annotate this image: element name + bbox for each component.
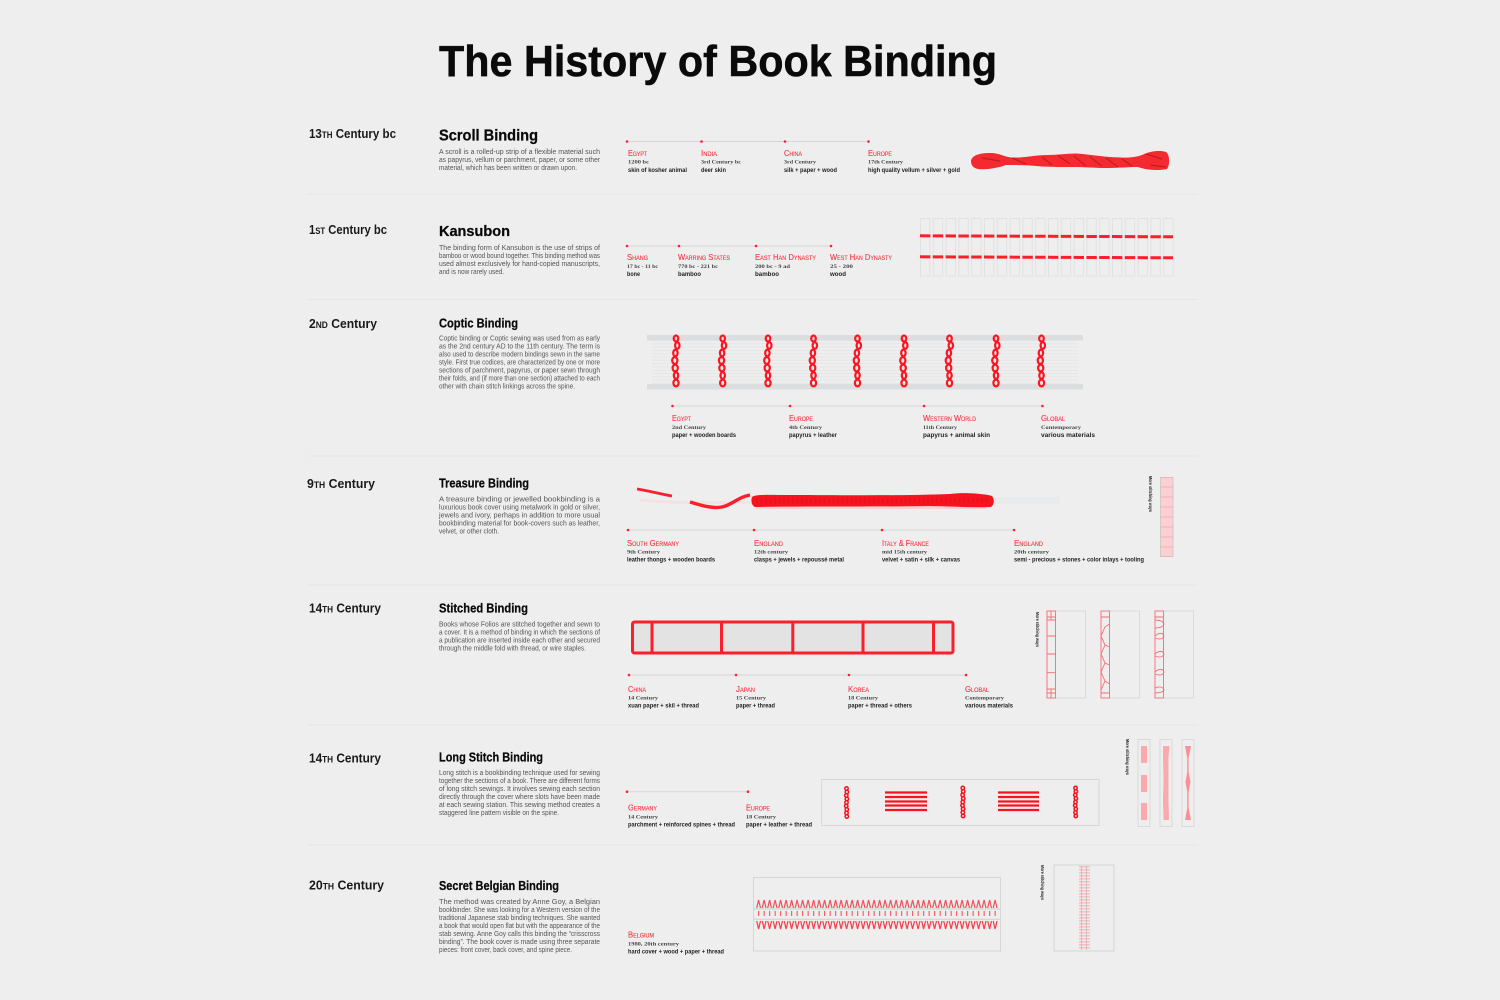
timeline xyxy=(626,140,960,174)
description: bookbinding material for book-covers such as leather, xyxy=(439,520,600,528)
description: A treasure binding or jewelled bookbinding is a xyxy=(439,496,600,504)
timeline entry: Belgium xyxy=(628,930,724,956)
description: a book that would open flat but with the appearance of the xyxy=(439,923,600,930)
heading: Treasure Binding xyxy=(439,476,529,490)
description: together the sections of a book. There are different forms xyxy=(439,778,600,785)
description: used almost exclusively for hand-copied manuscripts, xyxy=(439,261,600,268)
diagram: pink spine strip xyxy=(1160,477,1173,557)
rotated caption: More stitching ways xyxy=(1125,739,1130,776)
timeline: South Germany xyxy=(627,538,679,548)
timeline: silk + paper + wood xyxy=(784,168,837,174)
timeline: East Han Dynasty xyxy=(755,252,816,262)
description: luxurious book cover using metalwork in gold or silver, xyxy=(439,504,600,512)
description: also used to describe modern bindings sewn in the same xyxy=(439,352,600,358)
timeline xyxy=(671,405,1096,439)
timeline: parchment + reinforced spines + thread xyxy=(628,822,735,828)
timeline: 25 - 200 xyxy=(830,264,853,270)
description xyxy=(439,770,600,817)
timeline: West Han Dynasty xyxy=(830,252,892,262)
timeline: Europe xyxy=(789,413,813,423)
diagram: stitch pattern one xyxy=(1047,611,1086,698)
description: binding”. The book cover is made using three separate xyxy=(439,939,600,946)
diagram: long stitch variant three xyxy=(1182,740,1194,826)
timeline: paper + thread + others xyxy=(848,704,913,710)
diagram: stitch pattern three xyxy=(1155,611,1194,698)
timeline: 2nd Century xyxy=(672,425,706,431)
timeline: 1200 bc xyxy=(628,160,650,166)
timeline: deer skin xyxy=(701,168,726,174)
timeline: 20th century xyxy=(1014,550,1049,556)
heading: Stitched Binding xyxy=(439,600,528,616)
heading: Long Stitch Binding xyxy=(439,750,543,764)
description: stab sewing. Anne Goy calls this binding the “crisscross xyxy=(439,931,600,938)
description: through the middle fold with thread, or wire staples. xyxy=(439,646,586,652)
row: coptic binding xyxy=(309,316,1096,439)
row: scroll binding xyxy=(309,126,1169,174)
century label: 2ND Century xyxy=(309,316,378,331)
timeline: bone xyxy=(627,272,641,278)
description: pieces: front cover, back cover, and spine piece. xyxy=(439,947,572,954)
timeline: Contemporary xyxy=(965,696,1004,702)
description: The method was created by Anne Goy, a Belgian xyxy=(439,899,600,906)
timeline: 9th Century xyxy=(627,550,660,556)
illustration: coptic chain stitches xyxy=(647,335,1083,390)
description: staggered line pattern visible on the spine. xyxy=(439,810,559,817)
timeline: 17th Century xyxy=(868,160,903,166)
timeline: papyrus + animal skin xyxy=(923,433,990,439)
century label: 14TH Century xyxy=(309,750,382,766)
title: The History of Book Binding xyxy=(439,37,997,86)
timeline: England xyxy=(754,538,784,548)
timeline: Japan xyxy=(736,684,755,694)
century label: 13TH Century bc xyxy=(309,126,396,141)
rotated caption: More stitching ways xyxy=(1040,865,1045,901)
description: other with chain stitch linkings across the spine. xyxy=(439,384,575,390)
description: as papyrus, vellum or parchment, paper, or some other xyxy=(439,157,601,164)
heading: Kansubon xyxy=(439,223,510,240)
timeline: 17 bc - 11 bc xyxy=(627,264,659,270)
description xyxy=(439,899,600,954)
century label: 1ST Century bc xyxy=(309,222,387,237)
timeline: Western World xyxy=(923,413,977,423)
timeline: England xyxy=(1014,538,1044,548)
timeline: Shang xyxy=(627,252,648,262)
timeline: 18 Century xyxy=(746,814,776,820)
timeline: papyrus + leather xyxy=(789,433,838,439)
timeline: Europe xyxy=(868,148,892,158)
timeline: India xyxy=(701,148,717,158)
description: jewels and ivory, perhaps in addition to more usual xyxy=(438,512,600,520)
description: material, which has been written or drawn upon. xyxy=(439,165,577,172)
illustration: bamboo strips with red stitching xyxy=(920,218,1176,277)
description: their folds, and (if more than one section) attached to each xyxy=(439,376,600,382)
timeline: mid 15th century xyxy=(882,550,927,556)
timeline xyxy=(626,245,892,278)
timeline: bamboo xyxy=(755,272,779,278)
description xyxy=(439,336,600,390)
timeline: clasps + jewels + repoussé metal xyxy=(754,558,844,564)
description: velvet, or other cloth. xyxy=(439,528,499,536)
timeline: paper + wooden boards xyxy=(672,433,737,439)
description xyxy=(438,496,600,536)
century label: 20TH Century xyxy=(309,878,385,892)
timeline entry: Belgium: 1980, 20th century xyxy=(628,942,679,948)
illustration: crisscross binding xyxy=(754,878,1000,951)
description: directly through the cover where slots have been made xyxy=(439,794,600,801)
timeline: bamboo xyxy=(678,272,701,278)
timeline: 3rd Century bc xyxy=(701,160,742,166)
timeline: 4th Century xyxy=(789,425,822,431)
timeline: leather thongs + wooden boards xyxy=(627,558,716,564)
timeline: paper + thread xyxy=(736,704,775,710)
description: of long stitch sewings. It involves sewing each section xyxy=(439,786,600,793)
description: Coptic binding or Coptic sewing was used from as early xyxy=(439,336,600,342)
timeline: Global xyxy=(1041,413,1066,423)
description xyxy=(439,245,600,276)
timeline: 14 Century xyxy=(628,696,658,702)
timeline: Global xyxy=(965,684,990,694)
description: sections of parchment, papyrus, or paper sewn through xyxy=(439,368,600,374)
heading: Secret Belgian Binding xyxy=(439,878,559,893)
row: treasure binding xyxy=(307,476,1173,564)
timeline: paper + leather + thread xyxy=(746,822,812,828)
timeline: Egypt xyxy=(672,413,691,423)
diagram: long stitch variant two xyxy=(1160,740,1172,826)
timeline entry: Belgium: hard cover + wood + paper + thread xyxy=(628,950,724,956)
timeline: Warring States xyxy=(678,252,730,262)
timeline entry: Belgium: Belgium xyxy=(628,930,654,940)
description: A scroll is a rolled-up strip of a flexible material such xyxy=(439,149,600,156)
diagram: belgian spine xyxy=(1054,865,1114,951)
description: at each sewing station. This sewing method creates a xyxy=(439,802,600,809)
timeline xyxy=(627,529,1144,564)
timeline: China xyxy=(628,684,646,694)
description: traditional Japanese stab binding techniques. She wanted xyxy=(439,915,600,922)
timeline xyxy=(626,790,812,828)
timeline: skin of kosher animal xyxy=(628,168,687,174)
illustration: long stitch cover xyxy=(822,780,1099,826)
timeline: 15 Century xyxy=(736,696,766,702)
rotated caption: More stitching ways xyxy=(1035,612,1040,648)
timeline xyxy=(628,674,1014,710)
timeline: Korea xyxy=(848,684,869,694)
description: Long stitch is a bookbinding technique used for sewing xyxy=(439,770,600,777)
description: Books whose Folios are stitched together and sewn to xyxy=(439,622,600,628)
description xyxy=(439,622,600,652)
timeline: 3rd Century xyxy=(784,160,816,166)
description: a publication are inserted inside each other and secured xyxy=(439,638,600,644)
heading: Coptic Binding xyxy=(439,316,518,330)
timeline: 770 bc - 221 bc xyxy=(678,264,719,270)
timeline: Italy & France xyxy=(882,538,929,548)
timeline: 11th Century xyxy=(923,425,957,431)
timeline: various materials xyxy=(1041,433,1096,439)
description: style. First true codices, are characterized by one or more xyxy=(439,360,600,366)
timeline: 12th century xyxy=(754,550,788,556)
timeline: Egypt xyxy=(628,148,647,158)
timeline: Germany xyxy=(628,802,657,812)
heading: Scroll Binding xyxy=(439,128,538,144)
timeline: Europe xyxy=(746,802,770,812)
row: kansubon xyxy=(309,218,1176,278)
timeline: various materials xyxy=(965,704,1014,710)
description: bamboo or wood bound together. This binding method was xyxy=(439,253,600,260)
row: secret belgian binding xyxy=(309,865,1114,956)
century label: 14TH Century xyxy=(309,600,382,616)
timeline: semi - precious + stones + color inlays + tooling xyxy=(1014,558,1144,564)
timeline: velvet + satin + silk + canvas xyxy=(882,558,961,564)
timeline: China xyxy=(784,148,802,158)
description: and is now rarely used. xyxy=(439,269,504,276)
illustration: twisted red scroll cord xyxy=(971,151,1169,170)
timeline: xuan paper + skil + thread xyxy=(628,704,699,710)
description: a cover. It is a method of binding in which the sections of xyxy=(439,630,600,636)
row: stitched binding xyxy=(309,600,1194,710)
diagram: long stitch variant one xyxy=(1138,740,1150,826)
timeline: wood xyxy=(829,272,846,278)
timeline: Contemporary xyxy=(1041,425,1081,431)
century label: 9TH Century xyxy=(307,476,376,491)
description: The binding form of Kansubon is the use of strips of xyxy=(439,245,600,252)
timeline: high quality vellum + silver + gold xyxy=(868,168,960,174)
row: long stitch binding xyxy=(309,739,1194,828)
timeline: 200 bc - 9 ad xyxy=(755,264,791,270)
description: bookbinder. She was looking for a Western version of the xyxy=(439,907,600,914)
illustration: treasure binding thread xyxy=(637,489,1060,509)
description: as the 2nd century AD to the 11th century. The term is xyxy=(439,344,600,350)
diagram: stitch pattern two xyxy=(1101,611,1140,698)
timeline: 18 Century xyxy=(848,696,878,702)
illustration: stitched spine xyxy=(632,621,953,653)
timeline: 14 Century xyxy=(628,814,658,820)
rotated caption: More stitching ways xyxy=(1148,476,1153,513)
description xyxy=(439,149,601,172)
